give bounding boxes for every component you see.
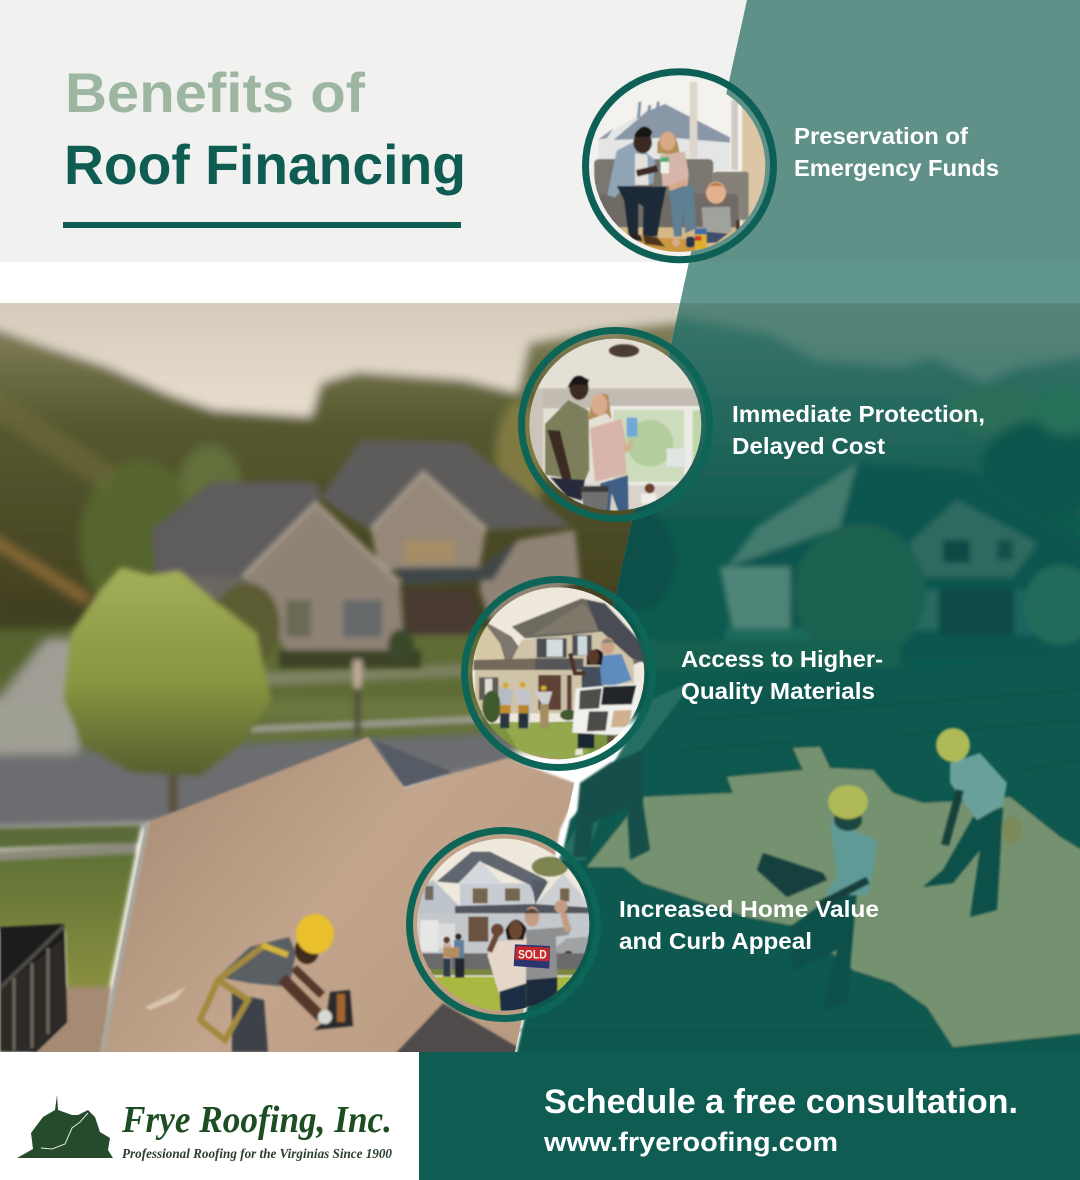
- label: preservation of emergency funds: [794, 123, 999, 181]
- footer call to action panel: www.fryeroofing.com: [543, 1127, 838, 1157]
- label: immediate protection: [732, 401, 985, 459]
- circle photo: couple with SOLD sign: [413, 833, 593, 1017]
- footer logo panel: [0, 1052, 419, 1180]
- worker with shingle stack: [757, 785, 877, 1010]
- circle photo: couple looking at ceiling leak: [527, 337, 707, 513]
- circle ring: SOLD sign: [410, 830, 598, 1018]
- icon: virginias silhouette: [17, 1095, 113, 1158]
- dumpster: [0, 924, 67, 1052]
- circle ring: shingle samples: [464, 580, 652, 768]
- logo wordmark: Frye Roofing, Inc.: [121, 1099, 392, 1141]
- SOLD sign: SOLD: [518, 948, 547, 962]
- worker on roof: [200, 914, 353, 1052]
- title: [64, 61, 466, 196]
- SOLD sign: [514, 944, 550, 969]
- worker on right: [923, 728, 1022, 917]
- roof foreground: [100, 737, 580, 1060]
- label: home value and curb appeal: and Curb Appeal: [619, 928, 812, 954]
- title: Benefits of: [65, 61, 365, 124]
- circle photo: family on sofa with phone: [590, 77, 770, 257]
- logo tagline: Professional Roofing for the Virginias Since 1900: [122, 1147, 392, 1162]
- circle photo: couple with shingle samples: [472, 587, 644, 760]
- label: higher-quality materials: Quality Materials: [681, 678, 875, 704]
- tree: [64, 567, 271, 813]
- title: Roof Financing: [64, 133, 466, 196]
- label: home value and curb appeal: Increased Home Value: [619, 896, 879, 922]
- header panel: [0, 0, 1080, 303]
- background worker behind circle: [573, 750, 650, 860]
- footer call to action panel: [419, 1052, 1080, 1180]
- background photo: teal overlay side: [500, 295, 1080, 1060]
- footer call to action panel: Schedule a free consultation.: [544, 1083, 1018, 1121]
- background photo: left natural side: [0, 295, 710, 1060]
- label: immediate protection: Immediate Protection,: [732, 401, 985, 427]
- blurred house: [152, 440, 580, 736]
- label: immediate protection: Delayed Cost: [732, 433, 885, 459]
- label: preservation of emergency funds: Emergency Funds: [794, 155, 999, 181]
- blurred house: [600, 463, 1080, 670]
- label: home value and curb appeal: [619, 896, 879, 954]
- circle ring: ceiling leak: [522, 330, 710, 518]
- label: higher-quality materials: [681, 646, 883, 704]
- label: higher-quality materials: Access to Higher-: [681, 646, 883, 672]
- circle ring: family on sofa: [586, 72, 774, 260]
- label: preservation of emergency funds: Preservation of: [794, 123, 968, 149]
- title underline: [63, 222, 461, 228]
